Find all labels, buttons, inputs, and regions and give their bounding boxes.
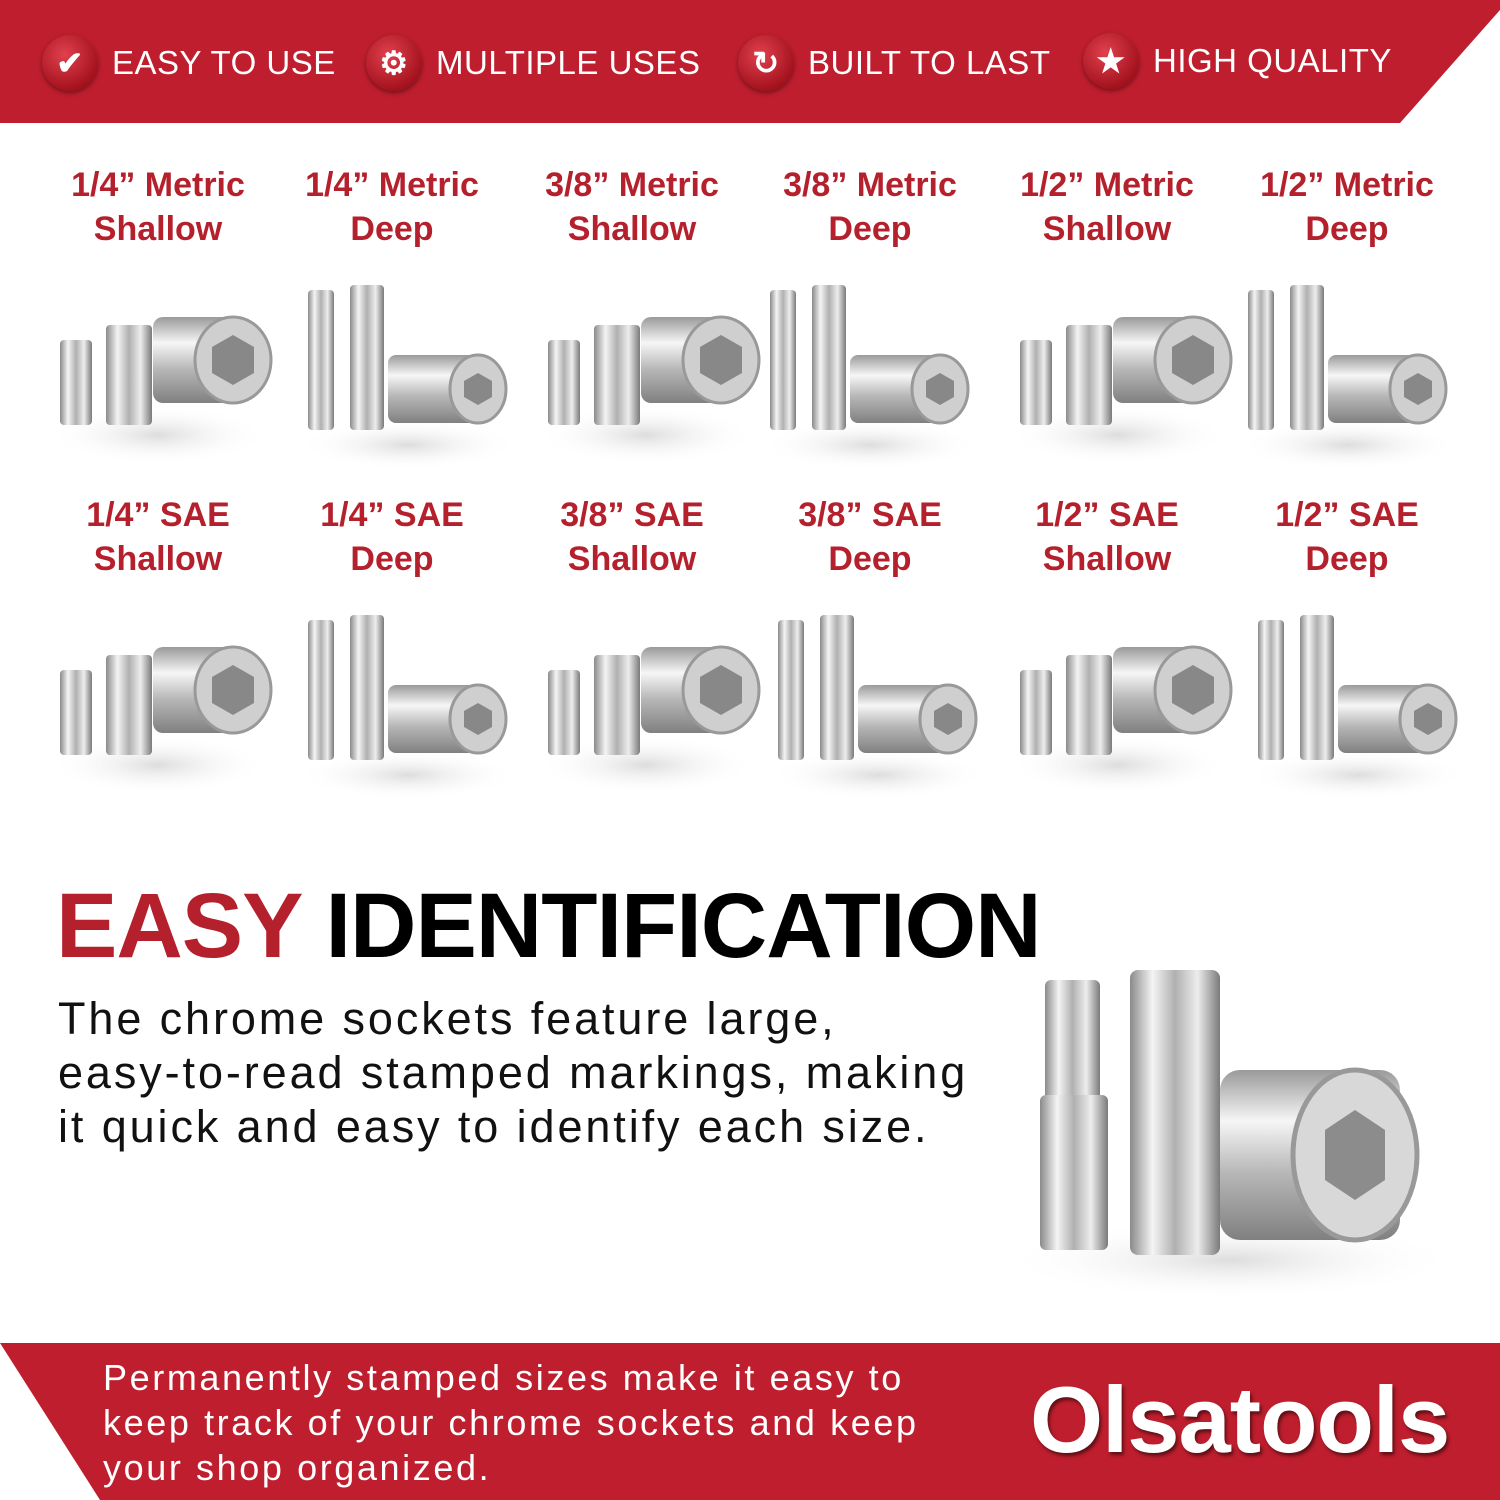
feature: high quality: ★ [1096,43,1126,79]
feature: high quality: HIGH QUALITY [1153,42,1392,79]
socket images row 2 [60,615,1458,788]
bottom text: keep track of your chrome sockets and keep [103,1402,919,1443]
label row 2: Shallow [568,540,696,578]
description text [58,993,968,1152]
label row 1: Shallow [94,210,222,248]
feature: high quality [1080,32,1392,94]
label row 1: 3/8” Metric [783,166,957,204]
label row 2: Deep [350,540,434,578]
label row 1: 3/8” Metric [545,166,719,204]
label row 1: Shallow [1043,210,1171,248]
feature: multiple uses: MULTIPLE USES [436,44,700,81]
label row 1: 1/2” Metric [1260,166,1434,204]
feature: built to last [736,34,1050,96]
feature: easy to use: EASY TO USE [112,44,336,81]
label row 2: Shallow [94,540,222,578]
label row 2: 1/4” SAE [86,496,230,534]
feature: multiple uses: ⚙ [379,45,409,81]
description text: it quick and easy to identify each size. [58,1101,929,1152]
label row 2: Shallow [1043,540,1171,578]
top banner [0,0,1500,123]
label row 1: Deep [1305,210,1389,248]
description text: The chrome sockets feature large, [58,993,837,1044]
feature: multiple uses [364,34,700,96]
description text: easy-to-read stamped markings, making [58,1047,968,1098]
label row 1 [71,166,1434,248]
label row 2: Deep [828,540,912,578]
label row 2: 1/2” SAE [1035,496,1179,534]
feature: built to last: BUILT TO LAST [808,44,1050,81]
bottom banner [0,1343,1500,1500]
feature: easy to use [40,34,336,96]
logo: Olsatools [1030,1367,1449,1472]
label row 2: 1/4” SAE [320,496,464,534]
label row 1: 1/2” Metric [1020,166,1194,204]
label row 1: Shallow [568,210,696,248]
label row 2: 1/2” SAE [1275,496,1419,534]
feature: easy to use: ✔ [56,45,84,81]
bottom text [103,1357,919,1488]
headline: EASY IDENTIFICATION [56,875,1041,977]
label row 2: 3/8” SAE [798,496,942,534]
label row 1: 1/4” Metric [71,166,245,204]
label row 2: 3/8” SAE [560,496,704,534]
label row 1: Deep [828,210,912,248]
label row 2 [86,496,1419,578]
label row 1: 1/4” Metric [305,166,479,204]
label row 2: Deep [1305,540,1389,578]
bottom text: Permanently stamped sizes make it easy to [103,1357,904,1398]
large socket image [1040,970,1420,1280]
socket images row 1 [60,285,1448,458]
label row 1: Deep [350,210,434,248]
bottom text: your shop organized. [103,1447,491,1488]
feature: built to last: ↻ [752,45,780,81]
